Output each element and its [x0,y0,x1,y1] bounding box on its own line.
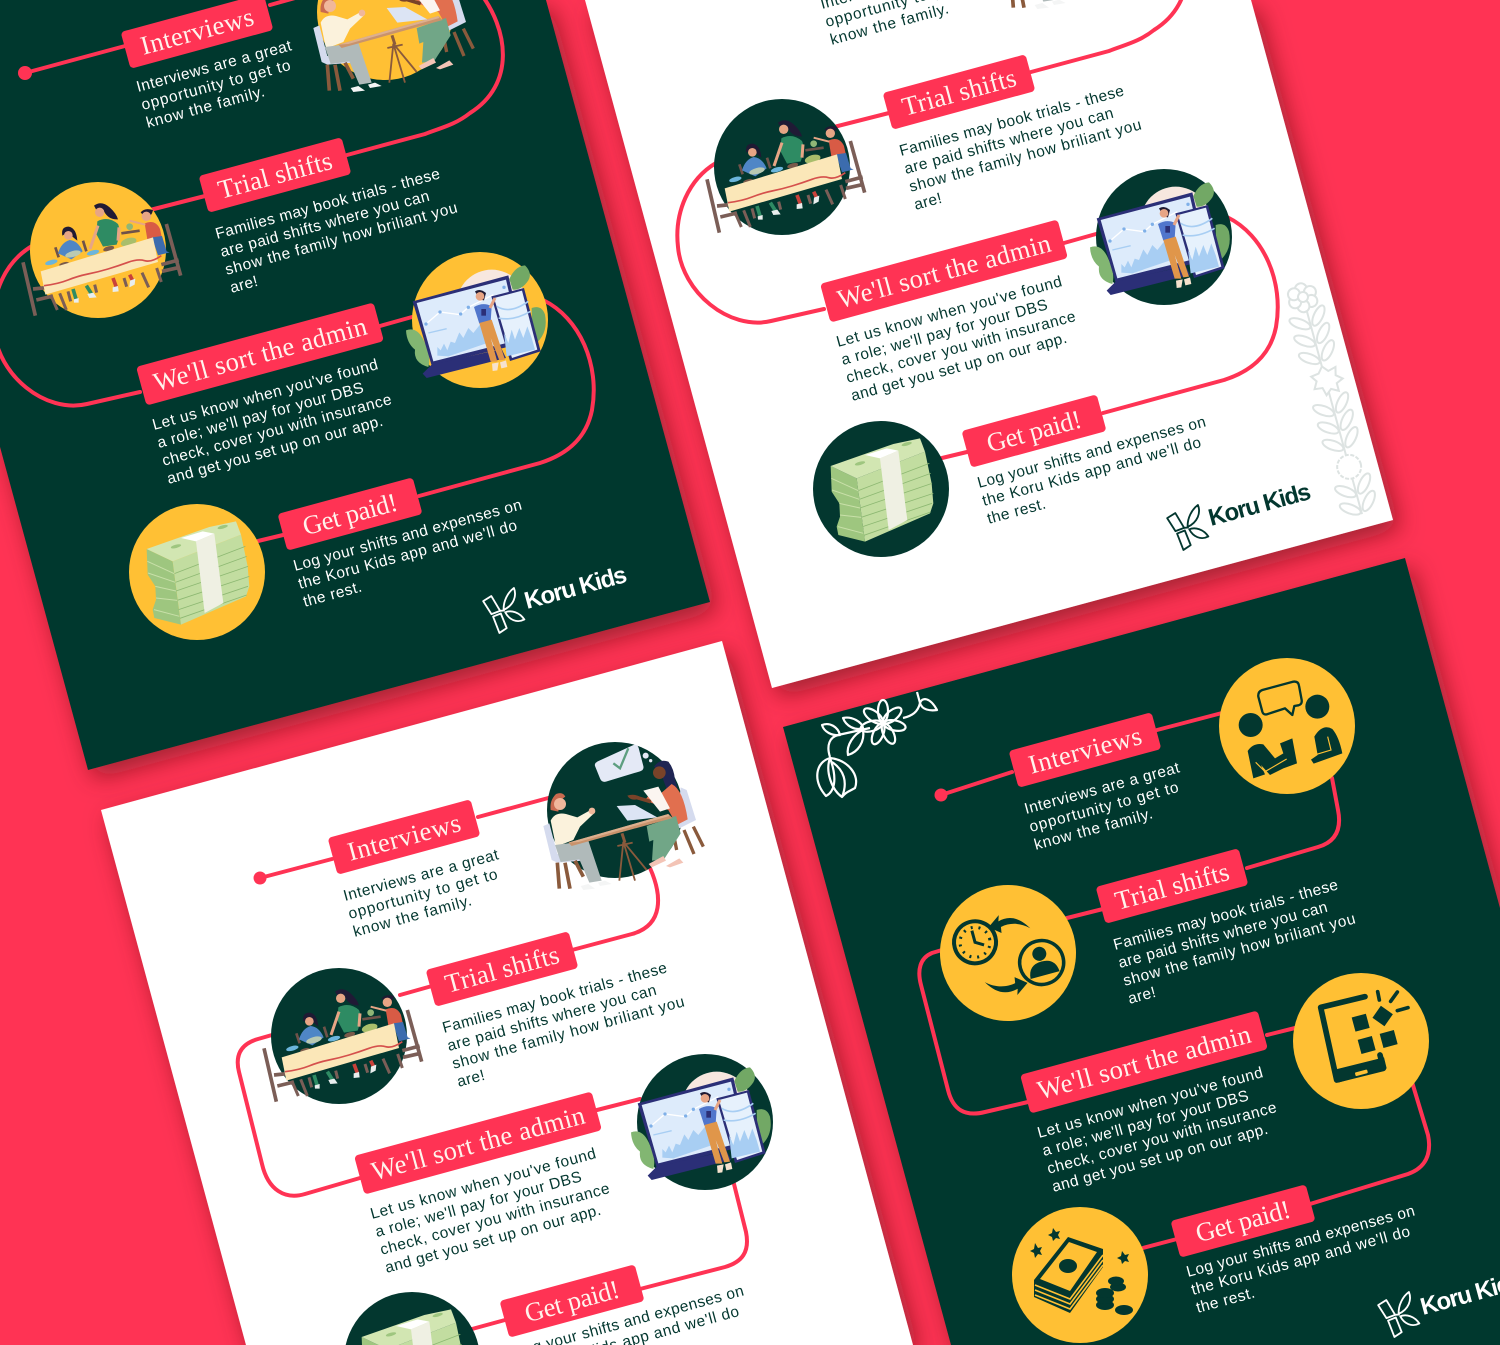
illustration: interview [997,0,1157,9]
body: trial shifts: are! [228,273,260,297]
label: get paid [277,477,423,551]
body: trial shifts: are paid shifts where you can [445,982,658,1055]
body: interviews: know the family. [1032,805,1155,854]
logo: Koru Kids [521,561,630,615]
body: admin: and get you set up on our app. [1050,1121,1270,1196]
body: admin: check, cover you with insurance [160,391,394,470]
label: admin: We'll sort the admin [1034,1019,1254,1105]
step: admin [354,1054,773,1277]
label: trial shifts: Trial shifts [899,62,1019,122]
body: get paid: the Koru Kids app and we'll do [980,434,1203,510]
body: trial shifts: are! [912,190,944,214]
label: admin: We'll sort the admin [150,311,370,397]
illustration: interview [313,0,473,92]
label: interviews: Interviews [344,807,464,867]
illustration: money stack [344,1292,480,1345]
body: admin: check, cover you with insurance [1045,1099,1279,1178]
step: get paid [1012,1184,1427,1343]
body: trial shifts [1112,875,1362,1008]
body: interviews [1023,759,1192,854]
logo [482,561,630,635]
icon: two people talking [1219,658,1355,794]
floral decoration [817,692,937,797]
body: interviews: know the family. [144,83,267,132]
label: trial shifts [883,54,1035,130]
body: interviews: Interviews are a great [135,37,294,96]
route line [677,0,1278,458]
label: get paid: Get paid! [521,1274,623,1328]
step: get paid [813,394,1218,557]
body: admin [151,355,398,488]
body: get paid: Log your shifts and expenses on [1185,1203,1417,1281]
label: interviews: Interviews [1025,720,1145,780]
panel: dark card top left [0,0,710,770]
illustration: family at table [707,99,865,235]
body: interviews: Interviews are a great [342,846,501,905]
body: get paid [976,414,1218,528]
body: trial shifts: are paid shifts where you can [218,188,431,261]
panel: white card bottom left [101,641,913,1345]
body: admin: and get you set up on our app. [165,413,385,488]
logo [1166,478,1314,552]
body: interviews [342,846,511,941]
label: get paid [1170,1184,1316,1258]
step: get paid [344,1264,756,1345]
illustration: laptop and tablet [631,1054,773,1190]
body: trial shifts: show the family how briliant you [907,116,1143,196]
body: trial shifts: are paid shifts where you can [902,105,1115,178]
body: admin: a role; we'll pay for your DBS [839,297,1049,369]
body: trial shifts: show the family how briliant you [450,993,686,1073]
logo: Koru Kids [1205,478,1314,532]
card content [677,0,1314,557]
label: trial shifts [426,931,578,1007]
body: trial shifts: Families may book trials - these [898,83,1126,160]
body: trial shifts [214,164,464,297]
body: trial shifts: Families may book trials - these [214,166,442,243]
body: get paid: the rest. [1194,1285,1257,1317]
card background [0,0,710,770]
body: get paid: the Koru Kids app and we'll do [1189,1223,1412,1299]
body: admin: check, cover you with insurance [844,308,1078,387]
panel: dark card bottom right [783,558,1500,1345]
body: trial shifts: show the family how briliant you [1121,910,1357,990]
body: trial shifts [441,958,691,1091]
body: admin [369,1144,616,1277]
body: admin: Let us know when you've found [369,1145,598,1223]
body: admin: and get you set up on our app. [849,330,1069,405]
body: get paid [1185,1203,1427,1317]
step: trial shifts [925,848,1362,1036]
label: interviews [328,799,480,875]
panel: white card top right [585,0,1393,688]
body: trial shifts: are! [455,1067,487,1091]
body: admin: a role; we'll pay for your DBS [1040,1088,1250,1160]
body: trial shifts [898,81,1148,214]
body: trial shifts: show the family how briliant you [223,199,459,279]
illustration: laptop and tablet [1090,169,1232,305]
card background [585,0,1393,688]
body: trial shifts: are paid shifts where you can [1116,899,1329,972]
body: interviews: know the family. [351,892,474,941]
card background [101,641,913,1345]
step: admin [1020,973,1429,1196]
body: get paid: the rest. [985,496,1048,528]
floral vine decoration [1278,278,1382,522]
body: admin [835,272,1082,405]
body: interviews: Interviews are a great [1023,759,1182,818]
route line [238,797,747,1329]
icon: clock and person exchange [925,870,1091,1036]
label: get paid [499,1264,645,1338]
illustration: laptop and tablet [406,252,548,388]
icon: tablet with app squares [1293,973,1429,1109]
body: admin: a role; we'll pay for your DBS [373,1169,583,1241]
body: admin: Let us know when you've found [151,356,380,434]
label: get paid: Get paid! [299,487,401,541]
body: trial shifts: are! [1126,984,1158,1008]
label: get paid: Get paid! [983,404,1085,458]
body: trial shifts: Families may book trials - these [1112,877,1340,954]
illustration: interview [543,742,703,890]
step: interviews [121,0,473,132]
label: trial shifts: Trial shifts [1112,856,1232,916]
label: admin: We'll sort the admin [368,1100,588,1186]
body: interviews [135,37,304,132]
illustration: money stack [129,504,265,640]
body: admin: a role; we'll pay for your DBS [155,380,365,452]
label: trial shifts: Trial shifts [442,939,562,999]
body: interviews: opportunity to get to [139,57,293,114]
body: interviews: know the family. [828,0,951,49]
logo [1377,1267,1500,1339]
label: interviews: Interviews [137,1,257,61]
body: get paid: Log your shifts and expenses on [976,414,1208,492]
illustration: family at table [264,968,422,1104]
label: interviews [1009,712,1161,788]
card background [783,558,1500,1345]
label: trial shifts [1096,848,1248,924]
label: get paid [961,394,1107,468]
step: get paid [129,477,534,640]
label: trial shifts [199,137,351,213]
body: admin: Let us know when you've found [835,273,1064,351]
label: admin: We'll sort the admin [834,228,1054,314]
body: interviews: opportunity to get to [346,866,500,923]
step: admin [820,169,1232,405]
body: get paid [292,497,534,611]
step: interviews [1009,658,1355,854]
body: admin: check, cover you with insurance [378,1180,612,1259]
body: get paid: Log your shifts and expenses on [292,497,524,575]
body: admin: Let us know when you've found [1036,1064,1265,1142]
icon: cash and coins [1012,1207,1148,1343]
step: trial shifts [264,931,691,1104]
step: interviews [328,742,703,941]
route line [919,713,1429,1248]
body: trial shifts: Families may book trials - these [441,960,669,1037]
body: interviews: opportunity to get to [1027,779,1181,836]
illustration: family at table [23,182,181,318]
label: trial shifts: Trial shifts [215,145,335,205]
label: interviews [121,0,273,69]
label: get paid: Get paid! [1192,1194,1294,1248]
illustration: money stack [813,421,949,557]
body: admin: and get you set up on our app. [383,1202,603,1277]
step: trial shifts [23,137,464,318]
body: get paid: the rest. [301,579,364,611]
body: admin [1036,1063,1283,1196]
step: interviews [805,0,1157,49]
step: admin [136,252,548,488]
body: get paid: the Koru Kids app and we'll do [296,517,519,593]
route line [0,0,594,541]
step: trial shifts [707,54,1148,235]
